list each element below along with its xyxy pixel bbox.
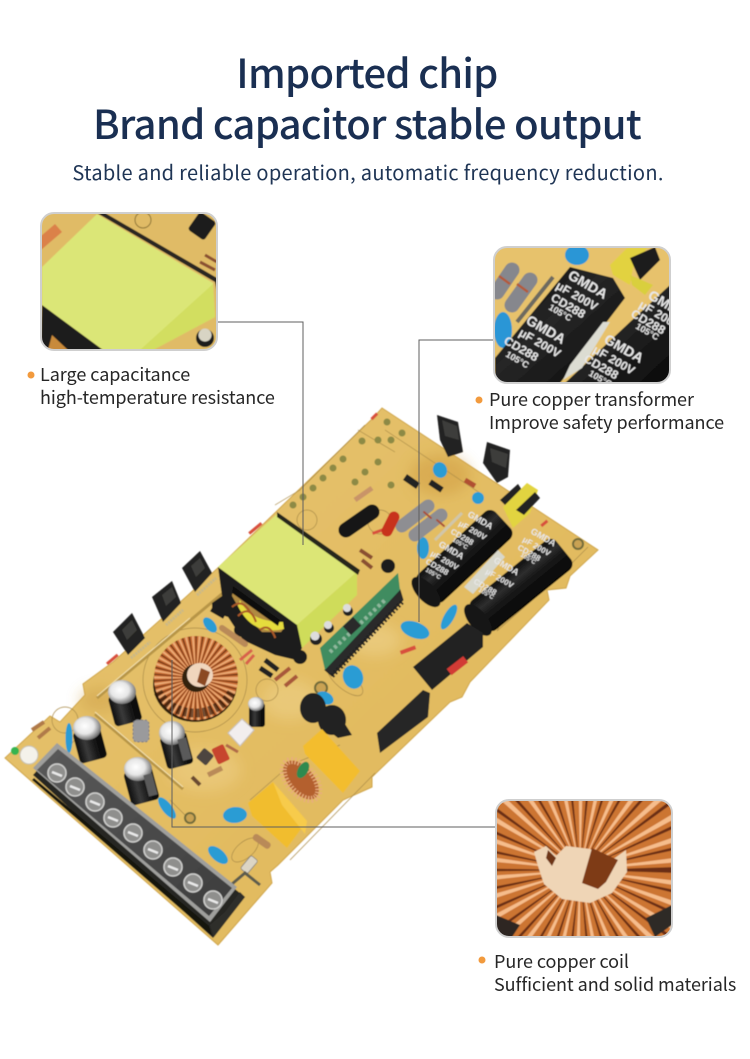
inset photo: capacitors closeup xyxy=(493,246,671,384)
gray power resistors xyxy=(402,506,444,535)
vertical electrolytic capacitors xyxy=(72,680,265,806)
large black capacitors: μF 200V xyxy=(484,567,516,590)
callout: pure copper transformer xyxy=(476,386,724,435)
green control board xyxy=(310,573,403,676)
callout: pure copper transformer: Improve safety performance xyxy=(489,409,724,435)
inset photo: capacitors closeup: 105°C xyxy=(547,302,574,324)
large black capacitors: CD288 xyxy=(424,557,451,577)
inset photo: capacitors closeup: μF 200V xyxy=(590,342,637,378)
bridge rectifier xyxy=(377,690,430,753)
callout: pure copper transformer: Pure copper transformer xyxy=(489,386,695,412)
large black capacitors: CD288 xyxy=(449,527,476,547)
inset photo: capacitors closeup: GMDA xyxy=(602,331,647,366)
large black capacitors: GMDA xyxy=(529,526,558,549)
large black capacitors: CD288 xyxy=(472,577,499,597)
inset photo: capacitors closeup: CD288 xyxy=(502,333,541,364)
inset photo: capacitors closeup: μF 200V xyxy=(636,297,683,333)
inset photo: capacitors closeup: μF 200V xyxy=(554,278,600,314)
power supply circuit board xyxy=(5,408,598,945)
leader line: capacitor callout xyxy=(419,340,494,622)
large black capacitors: 105°C xyxy=(424,568,442,581)
title xyxy=(93,42,642,151)
yellow X capacitors xyxy=(248,729,360,848)
heatsink transistors xyxy=(113,415,510,655)
board mottling xyxy=(80,455,470,792)
inset photo: capacitors closeup: 105°C xyxy=(587,368,614,390)
gold jumper bars xyxy=(95,593,223,789)
leader line: coil callout xyxy=(172,660,496,827)
blue capacitors xyxy=(66,460,484,867)
main transformer xyxy=(212,512,360,660)
large black capacitors: 105°C xyxy=(451,538,469,551)
large black capacitors: μF 200V xyxy=(457,519,489,542)
black switch block xyxy=(413,623,483,690)
red silk marks xyxy=(106,412,548,665)
primary windings xyxy=(232,603,276,640)
leader line: transformer callout xyxy=(217,322,303,545)
inset photo: capacitors closeup: GMDA xyxy=(566,267,611,302)
subtitle: Stable and reliable operation, automatic frequency reduction. xyxy=(72,157,664,186)
large black capacitors: 105°C xyxy=(519,553,537,566)
callout: large capacitance: high-temperature resistance xyxy=(40,384,275,410)
callout: pure copper coil: Sufficient and solid materials xyxy=(494,971,736,997)
inset photo: capacitors closeup: 105°C xyxy=(634,321,661,343)
large black capacitors: GMDA xyxy=(466,509,495,532)
main copper toroid coil xyxy=(153,646,237,722)
title: Brand capacitor stable output xyxy=(93,93,642,151)
black suppressor parts xyxy=(300,693,352,738)
resistor and diodes near transformer xyxy=(222,628,297,686)
small copper coil xyxy=(276,754,326,806)
indicator LED and trimmer xyxy=(11,722,50,764)
title: Imported chip xyxy=(236,42,498,100)
callout: pure copper coil: Pure copper coil xyxy=(494,948,629,974)
callout: large capacitance xyxy=(28,361,275,410)
large black capacitors: GMDA xyxy=(437,539,466,562)
small yellow transformer xyxy=(500,483,540,528)
large black capacitors: 105°C xyxy=(477,588,495,601)
inset photo: capacitors closeup: μF 200V xyxy=(516,325,563,361)
mounting holes xyxy=(185,418,583,823)
inset photo: copper coil closeup xyxy=(496,798,672,942)
large black capacitors: μF 200V xyxy=(521,535,553,558)
inset photo: capacitors closeup: GMDA xyxy=(524,312,569,347)
terminal block xyxy=(32,743,245,938)
large black capacitors: μF 200V xyxy=(429,549,461,572)
small parts on upper board xyxy=(346,477,475,573)
white connector and small parts xyxy=(192,719,272,885)
board outline xyxy=(5,408,598,945)
inset photo: capacitors closeup: CD288 xyxy=(548,290,588,321)
large black capacitors: GMDA xyxy=(492,555,521,578)
inset photo: transformer closeup xyxy=(41,211,217,350)
inset photo: capacitors closeup: 105°C xyxy=(504,349,531,371)
inset photo: capacitors closeup: CD288 xyxy=(628,306,668,337)
callout: pure copper coil xyxy=(478,948,736,997)
silkscreen outlines xyxy=(52,425,588,866)
inset photo: capacitors closeup: CD288 xyxy=(582,351,621,382)
inset photo: capacitors closeup: GMDA xyxy=(646,287,691,322)
large black capacitors: CD288 xyxy=(516,543,543,563)
callout: large capacitance: Large capacitance xyxy=(40,361,190,387)
large black capacitors xyxy=(406,507,576,640)
